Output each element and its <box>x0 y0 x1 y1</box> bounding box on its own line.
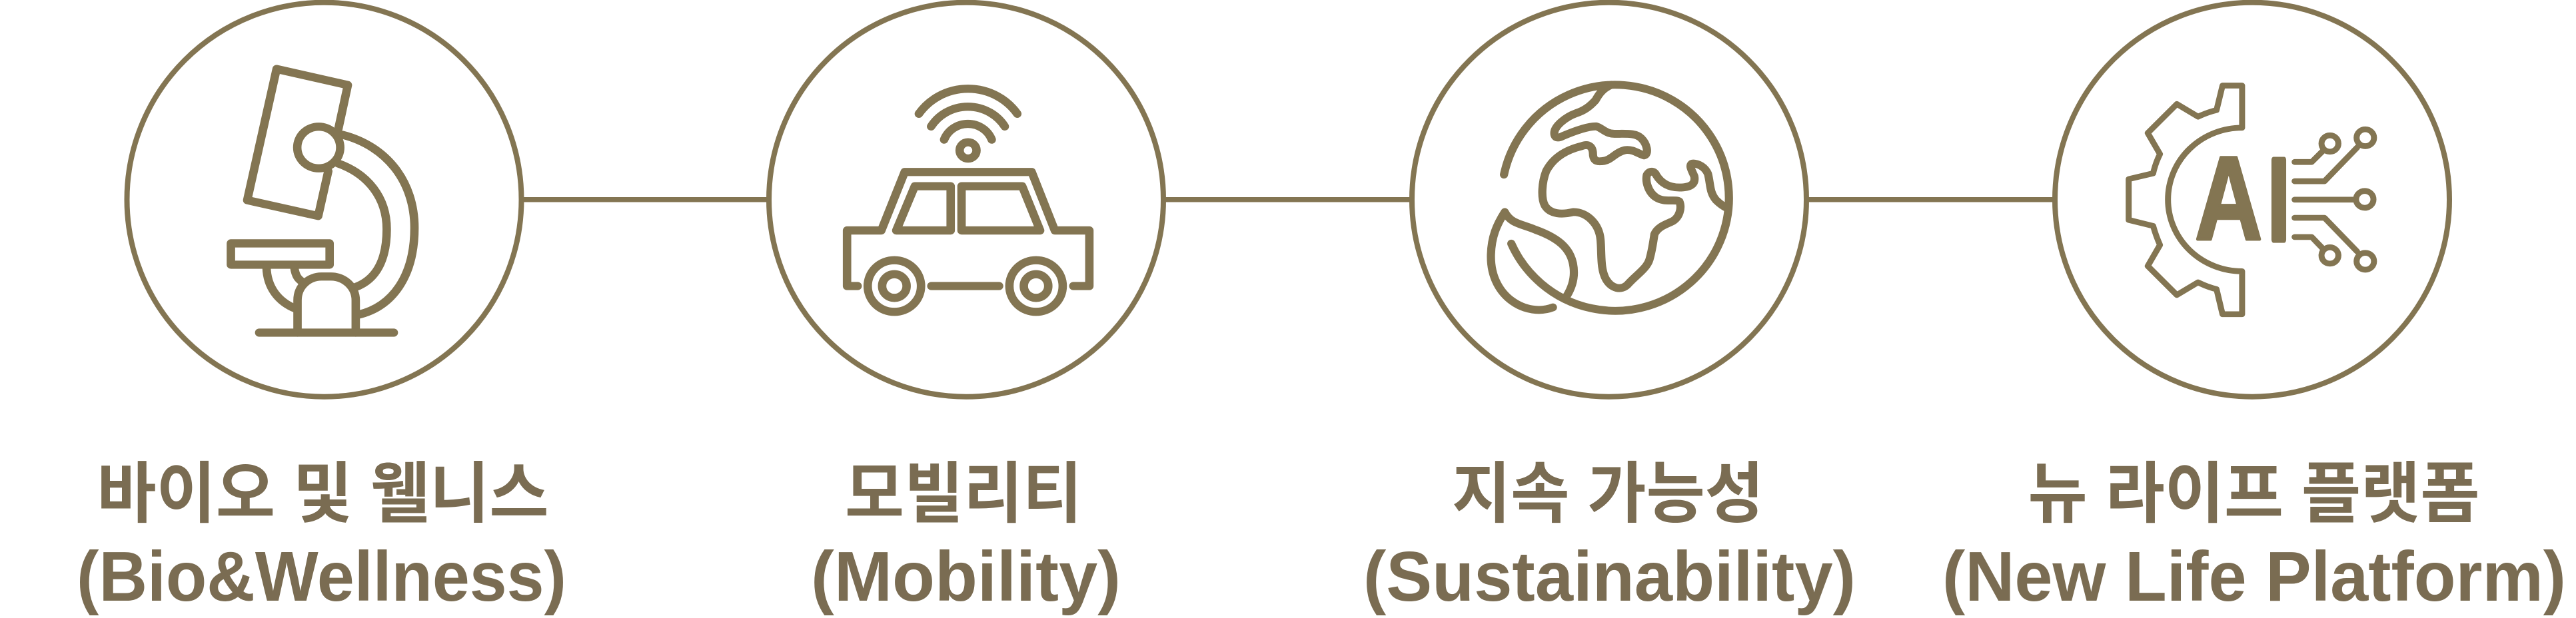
icon: globe with leaf <box>1491 85 1729 311</box>
label: sustainability: 지속 가능성 <box>1452 457 1764 531</box>
label: mobility: (Mobility) <box>811 537 1121 616</box>
circle: mobility <box>769 3 1163 397</box>
icon: microscope <box>231 69 414 333</box>
label: bio and wellness: (Bio&Wellness) <box>77 537 566 616</box>
circle: new life platform <box>2055 3 2449 397</box>
connector: mobility to sustainability <box>1163 197 1413 202</box>
panel: mobility <box>769 3 1163 616</box>
icon: AI gear circuit: I <box>2269 135 2289 264</box>
label: new life platform: 뉴 라이프 플랫폼 <box>2028 457 2480 531</box>
panel: sustainability <box>1363 3 1856 616</box>
label: sustainability <box>1363 457 1856 616</box>
circle: sustainability <box>1412 3 1806 397</box>
circle: bio and wellness <box>127 3 521 397</box>
label: bio and wellness <box>77 457 566 616</box>
panel: new life platform <box>1942 3 2566 616</box>
panel: bio and wellness <box>77 3 566 616</box>
label: mobility: 모빌리티 <box>845 457 1082 531</box>
label: sustainability: (Sustainability) <box>1363 537 1856 616</box>
connector: bio to mobility <box>520 197 770 202</box>
icon: connected car <box>847 89 1089 312</box>
icon: AI gear circuit <box>2129 86 2374 314</box>
label: new life platform: (New Life Platform) <box>1942 537 2566 616</box>
label: new life platform <box>1942 457 2566 616</box>
label: bio and wellness: 바이오 및 웰니스 <box>97 457 549 531</box>
label: mobility <box>811 457 1121 616</box>
connector: sustainability to new life platform <box>1806 197 2056 202</box>
icon: AI gear circuit: A <box>2195 132 2262 264</box>
